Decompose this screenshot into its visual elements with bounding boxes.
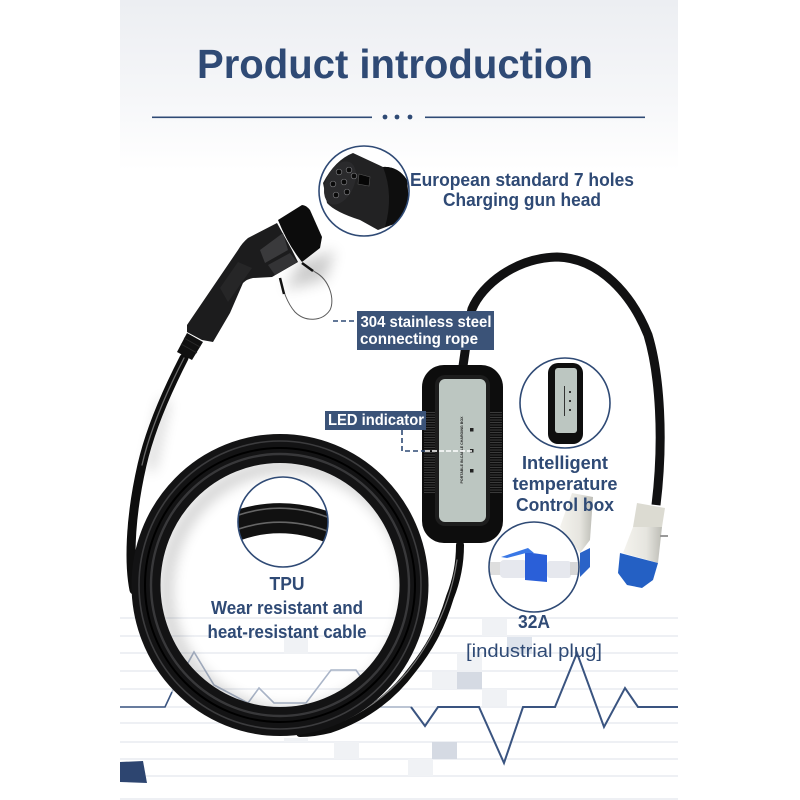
callout: LED indicator: LED indicator bbox=[328, 412, 424, 429]
label: TPU cable bbox=[208, 574, 366, 642]
soft shadows under product bbox=[150, 250, 410, 714]
main blue industrial plug bbox=[618, 503, 668, 588]
title: Product introduction bbox=[197, 41, 593, 87]
coiled black cable bbox=[131, 358, 460, 733]
charging control box bbox=[422, 365, 503, 543]
inset circle: industrial plug bbox=[489, 522, 580, 612]
label: control box: temperature bbox=[512, 474, 618, 494]
callout: stainless steel rope bbox=[333, 311, 494, 350]
cable to plug bbox=[463, 257, 660, 505]
callout: gun head bbox=[410, 170, 634, 210]
inset circle: gun head bbox=[318, 146, 409, 236]
callout: LED indicator bbox=[325, 411, 473, 451]
inset circle: control box bbox=[520, 358, 610, 448]
label: industrial plug: [industrial plug] bbox=[466, 641, 602, 661]
panel: page background bbox=[120, 0, 678, 800]
callout: stainless steel rope: 304 stainless steel bbox=[360, 314, 492, 331]
label: industrial plug bbox=[466, 612, 602, 661]
label: TPU cable: Wear resistant and bbox=[211, 598, 363, 618]
label: control box: Intelligent bbox=[522, 453, 608, 473]
charging control box: PORTABLE IN-CABLE CHARGING BOX bbox=[460, 416, 464, 484]
label: control box bbox=[512, 453, 618, 515]
callout: gun head: Charging gun head bbox=[443, 190, 601, 210]
rear blue plug bbox=[560, 493, 593, 577]
corner accent block bbox=[120, 761, 147, 783]
label: industrial plug: 32A bbox=[518, 612, 550, 632]
label: control box: Control box bbox=[516, 495, 614, 515]
callout: stainless steel rope: connecting rope bbox=[360, 331, 478, 348]
EV charging gun connector bbox=[177, 205, 332, 360]
decorative line chart bbox=[120, 652, 678, 763]
label: TPU cable: heat-resistant cable bbox=[208, 622, 366, 642]
label: TPU cable: TPU bbox=[270, 574, 304, 594]
title divider bbox=[152, 115, 645, 119]
callout: gun head: European standard 7 holes bbox=[410, 170, 634, 190]
inset circle: cable cross-section bbox=[233, 477, 335, 567]
